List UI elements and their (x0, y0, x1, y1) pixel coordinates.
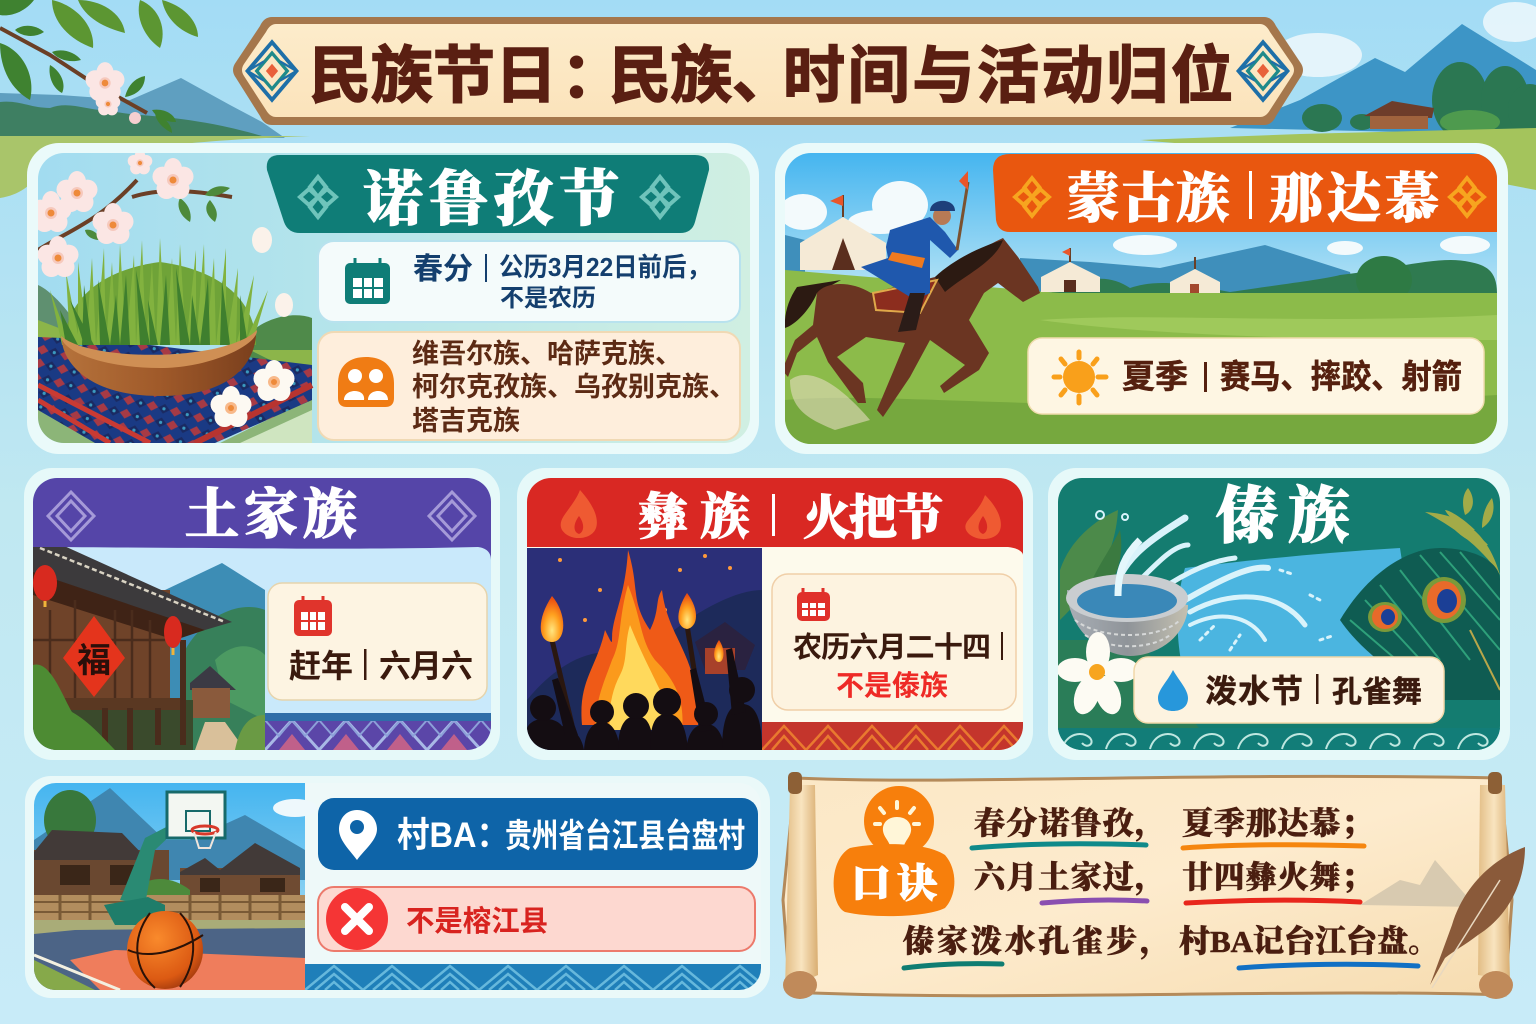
pattern band (1058, 728, 1500, 750)
left roller (783, 772, 818, 999)
illustration: bowl (61, 330, 257, 396)
tree line (1050, 260, 1497, 293)
icon: lightbulb badge (864, 786, 934, 858)
panel: 诺鲁孜节 (27, 143, 759, 454)
icon: branch with leaves and blossom (0, 0, 198, 133)
houses (34, 830, 300, 898)
title plaque (233, 17, 1303, 125)
mountains right (1230, 24, 1536, 135)
water (1178, 548, 1420, 680)
mnemonic text: 廿四彝火舞； (1182, 860, 1372, 895)
口诀 badge (834, 844, 954, 916)
scene: hills and meadow (38, 285, 312, 443)
text: 村BA： (397, 816, 509, 855)
info: 春分 (318, 241, 740, 322)
icon: quill feather (1430, 847, 1525, 988)
illustration: carpet (38, 337, 312, 443)
heading: 傣族 (1216, 483, 1350, 551)
header band (527, 478, 1023, 555)
icon: left ornament (248, 42, 296, 100)
icon: flame left (561, 490, 597, 538)
ornament right (642, 177, 678, 217)
info: 夏季: 赛马、摔跤、射箭 (1220, 358, 1462, 395)
title text (309, 42, 1233, 111)
mountains sketch (1360, 860, 1475, 907)
title text: ： (561, 42, 623, 111)
heading: 诺鲁孜节 (363, 167, 619, 233)
fu character: 福 (77, 642, 111, 680)
mnemonic text: 村BA记台江台盘。 (1179, 924, 1439, 959)
text: 不是榕江县 (406, 905, 548, 938)
panel header (993, 154, 1497, 232)
text lines: 维吾尔族、哈萨克族、 (412, 339, 682, 369)
warning text: 不是傣族 (836, 670, 948, 701)
warning bar (318, 887, 755, 951)
info: 赶年: 六月六 (379, 648, 473, 684)
icon: map pin (339, 810, 377, 860)
icon: yurt small (1170, 257, 1220, 293)
text: 赶年 (289, 648, 353, 684)
ornament right (1450, 178, 1484, 216)
icon: farmhouse (1364, 101, 1434, 129)
panel: 彝族 火把节: 火把节 (803, 492, 943, 545)
mnemonic text: 夏季那达慕； (1182, 806, 1372, 841)
info: 泼水节 (1134, 657, 1444, 723)
illustration: palm frond (1425, 488, 1500, 575)
scroll: 口诀 (783, 772, 1525, 999)
title text: 民族、 (609, 42, 794, 111)
icon: calendar (345, 258, 390, 304)
panel: 土家族 (24, 468, 500, 760)
text: 农历六月二十四 (793, 631, 991, 664)
ornament left (300, 177, 336, 217)
basketball (127, 911, 203, 989)
info: 春分: 公历3月22日前后， (499, 252, 711, 282)
info: 春分: 不是农历 (500, 285, 596, 312)
header band (33, 478, 491, 560)
illustration: basketball court scene (34, 783, 317, 990)
illustration: silver bowl (1066, 540, 1188, 656)
text lines (412, 339, 736, 436)
torch mid (678, 593, 702, 720)
text: 泼水节 (1205, 673, 1303, 709)
illustration: leaves (1060, 510, 1121, 620)
info: 泼水节: 孔雀舞 (1332, 676, 1422, 709)
info: 夏季 (1028, 338, 1484, 414)
text lines: 柯尔克孜族、乌孜别克族、 (412, 372, 736, 402)
illustration: peacock feathers (1340, 548, 1500, 700)
ornament left (48, 492, 94, 540)
panel: 村BA (25, 776, 770, 998)
illustration: night bonfire scene (527, 548, 762, 750)
title text: 时间与活动归位 (783, 42, 1233, 111)
icon: right ornament (1239, 42, 1287, 100)
parchment (783, 776, 1512, 996)
illustration: water splash (1096, 511, 1335, 650)
icon: flame right (965, 495, 1001, 539)
right roller (1478, 772, 1513, 999)
heading: 蒙古族 (1066, 169, 1230, 229)
illustration: stilted house (33, 545, 265, 750)
panel: 傣族 (1048, 468, 1510, 760)
saddle (873, 280, 937, 313)
ornament right (429, 492, 475, 540)
illustration: blossom branch (30, 150, 293, 317)
location bar: 贵州省台江县台盘村 (505, 817, 745, 854)
hoop (104, 792, 225, 925)
illustration: small house (190, 666, 236, 718)
torch left (541, 596, 572, 725)
口诀 badge: 口诀 (851, 861, 937, 906)
illustration: horse and rider (782, 171, 1040, 430)
info: 赶年 (268, 583, 487, 700)
rider (861, 217, 958, 300)
lanterns (33, 565, 57, 601)
meadow (785, 270, 1497, 444)
icon: yurt large (800, 195, 886, 270)
icon: people (338, 357, 394, 407)
fence (34, 895, 305, 920)
location bar (318, 798, 758, 870)
icon: calendar (294, 596, 332, 636)
illustration: frangipani (1057, 632, 1139, 718)
mnemonic text (903, 806, 1439, 961)
illustration: mountain (165, 563, 265, 698)
icon: cross circle (326, 888, 388, 950)
pattern band (265, 713, 491, 750)
panel: 蒙古族 那达慕 (775, 143, 1508, 454)
icon: calendar (797, 588, 830, 621)
mnemonic text: 傣家泼水孔雀步， (903, 924, 1171, 961)
heading: 土家族 (185, 484, 357, 545)
pattern band (305, 964, 761, 990)
mountains (785, 235, 1355, 296)
court (34, 920, 305, 990)
text: 春分 (413, 253, 473, 286)
trees right (1302, 62, 1536, 138)
mnemonic text: 春分诺鲁孜， (974, 806, 1166, 843)
panel header: 那达慕 (1269, 169, 1439, 229)
mountains left (0, 78, 285, 138)
panel: 彝族 火把节 (517, 468, 1033, 760)
icon: water drop (1158, 670, 1188, 711)
icon: sun (1054, 352, 1106, 403)
icon: yurt mid (1041, 248, 1100, 292)
mnemonic text: 六月土家过， (974, 860, 1166, 897)
underlines (904, 844, 1418, 968)
info: 民族 (318, 332, 740, 440)
text: 夏季 (1122, 358, 1188, 395)
ornament left (1015, 178, 1049, 216)
text lines: 塔吉克族 (412, 406, 520, 436)
info: date (772, 574, 1016, 710)
pattern band (762, 722, 1023, 750)
heading: 彝族 (638, 489, 750, 545)
crowd silhouettes (527, 648, 762, 750)
illustration: white flowers on carpet (210, 360, 294, 427)
panel header (267, 155, 709, 233)
illustration: wheatgrass (50, 238, 268, 345)
hut (695, 622, 755, 674)
tree (1356, 256, 1412, 293)
title text: 民族节日 (309, 42, 557, 111)
